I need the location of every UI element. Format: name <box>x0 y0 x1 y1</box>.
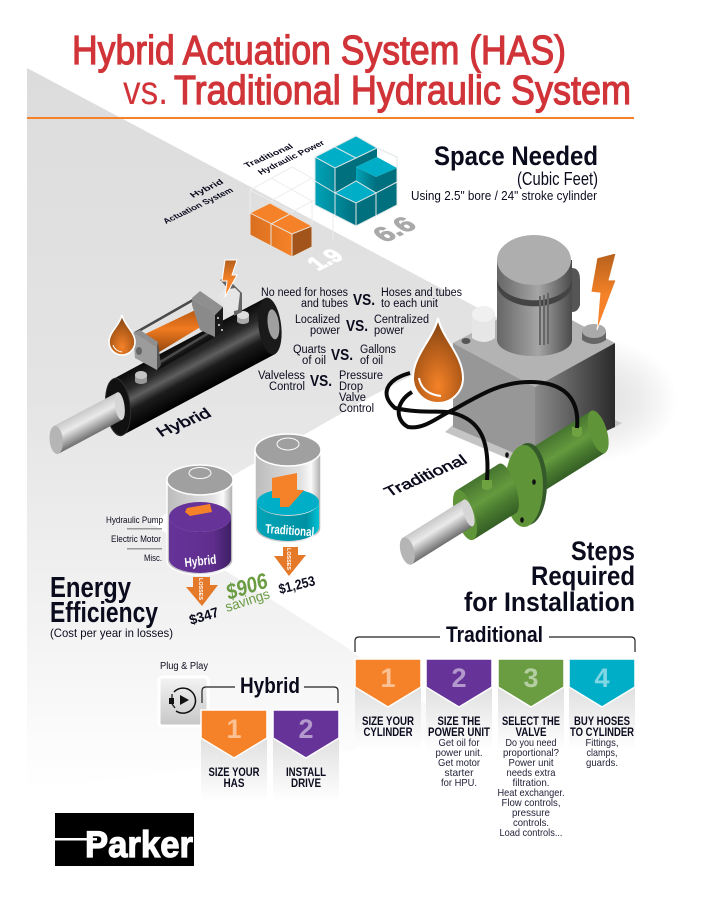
row: hoses: No need for hoses <box>261 287 348 299</box>
savings callout: savings <box>223 585 272 615</box>
steps heading: for Installation <box>464 587 635 617</box>
step card 3: proportional? <box>503 747 559 759</box>
arrow: hybrid losses <box>186 577 218 606</box>
traditional power unit illustration <box>381 235 622 568</box>
hybrid step card 2: INSTALL <box>286 767 326 779</box>
icon: lightning small <box>222 260 237 297</box>
arrow: traditional losses: LOSSES <box>285 548 291 570</box>
title: vs. <box>123 67 168 113</box>
row: power: VS. <box>346 318 368 335</box>
value 1.9: 1.9 <box>301 245 350 275</box>
step card 3: pressure <box>512 807 550 819</box>
hybrid heading with bracket: Hybrid <box>240 673 300 698</box>
hybrid step card 1: SIZE YOUR <box>208 767 260 779</box>
white filter cap <box>462 306 495 344</box>
panel: hybrid steps <box>159 661 339 801</box>
green flange <box>505 443 547 527</box>
step card 3 <box>498 659 564 839</box>
row: hoses: and tubes <box>301 298 348 310</box>
heading: (Cost per year in losses) <box>50 626 173 640</box>
legend labels <box>106 515 163 564</box>
row: control: Drop <box>339 381 363 393</box>
value $347: $347 <box>187 604 221 628</box>
panel: space needed <box>161 136 598 275</box>
row: oil <box>293 344 396 367</box>
row: control: Control <box>269 381 305 393</box>
row: control: Control <box>339 403 374 415</box>
value 6.6: 6.6 <box>366 212 423 247</box>
icon: lightning large <box>591 253 616 330</box>
hybrid step card 2: 2 <box>298 714 314 744</box>
hybrid step card 1: 1 <box>226 714 242 744</box>
steps heading <box>464 536 635 617</box>
cube chart: traditional 6.6 <box>315 136 397 226</box>
hybrid label: Hybrid <box>153 406 215 440</box>
motor button <box>582 324 606 344</box>
label: hybrid actuation system: Hybrid <box>188 178 226 199</box>
step card 4: TO CYLINDER <box>570 727 635 739</box>
step card 2: power unit. <box>436 747 482 759</box>
row: hoses: VS. <box>353 292 375 309</box>
step card 3: filtration. <box>512 777 550 789</box>
space needed heading: (Cubic Feet) <box>517 169 598 189</box>
hybrid step card 1 <box>201 710 267 801</box>
row: control: VS. <box>310 373 332 390</box>
step card 2: 2 <box>451 663 467 693</box>
mini actuator <box>133 277 242 370</box>
label: traditional hydraulic power: Traditional <box>242 142 295 169</box>
step card 3: Do you need <box>506 737 557 749</box>
step card 3: controls. <box>513 817 549 829</box>
hoses <box>387 373 577 480</box>
background grey diagonal wedge <box>27 68 678 790</box>
step card 4 <box>569 659 635 769</box>
step card 2: Get oil for <box>438 737 480 749</box>
traditional label: Traditional <box>381 453 471 500</box>
label: hybrid actuation system: Actuation System <box>161 186 235 225</box>
row: hoses: to each unit <box>381 298 439 310</box>
hybrid step card 2 <box>273 710 339 801</box>
step card 3: VALVE <box>516 727 547 739</box>
row: control <box>258 370 383 415</box>
step card 1: CYLINDER <box>364 727 413 739</box>
heading: Efficiency <box>50 597 158 629</box>
comparison list <box>258 287 462 415</box>
step card 3: 3 <box>523 663 539 693</box>
steps heading: Steps <box>571 536 635 566</box>
step card 3: SELECT THE <box>502 716 560 728</box>
title <box>72 27 631 113</box>
hybrid cylinder illustration <box>47 260 286 457</box>
hybrid battery: Hybrid <box>184 552 217 570</box>
step card 2: for HPU. <box>441 777 477 789</box>
panel: steps required <box>355 536 635 839</box>
legend labels: Misc. <box>144 553 162 564</box>
heading <box>50 572 173 640</box>
rod <box>397 497 477 568</box>
step card 2: Get motor <box>438 757 480 769</box>
row: oil: Quarts <box>293 344 326 356</box>
step card 2: POWER UNIT <box>428 727 490 739</box>
traditional battery <box>255 434 321 543</box>
green cylinder rear section <box>509 406 613 504</box>
row: power: Centralized <box>374 314 429 326</box>
base plate <box>445 420 622 470</box>
row: power: Localized <box>295 314 340 326</box>
step card 1: 1 <box>380 663 396 693</box>
tank box <box>453 300 615 462</box>
step card 4: clamps, <box>586 747 618 759</box>
arrow: hybrid losses: LOSSES <box>197 578 203 600</box>
row: control: Valveless <box>258 370 305 382</box>
step card 4: 4 <box>594 663 610 693</box>
parker logo <box>55 813 194 866</box>
heading: Energy <box>50 572 131 604</box>
ports <box>482 427 582 490</box>
title underline <box>27 117 634 119</box>
arrow: traditional losses <box>274 547 306 576</box>
rod <box>47 390 127 457</box>
row: control: Pressure <box>339 370 383 382</box>
green cylinder front section <box>448 459 524 545</box>
cube chart: hybrid 1.9 <box>250 203 312 257</box>
space needed heading <box>411 141 598 203</box>
hybrid battery <box>167 465 233 575</box>
wireframe grid <box>250 167 333 250</box>
step card 3: Flow controls, <box>502 797 560 809</box>
plug and play label: Plug & Play <box>160 661 208 672</box>
space needed heading: Using 2.5" bore / 24" stroke cylinder <box>411 189 597 203</box>
row: oil: Gallons <box>360 344 396 356</box>
icon: oil drop large <box>413 318 463 403</box>
row: power: power <box>310 325 340 337</box>
hybrid step card 2: DRIVE <box>291 778 321 790</box>
step card 4: Fittings, <box>586 737 618 749</box>
black cylinder body <box>101 293 286 441</box>
step card 4: BUY HOSES <box>574 716 630 728</box>
motor <box>497 235 580 356</box>
step card 2: starter <box>444 767 474 779</box>
hybrid step card 1: HAS <box>224 778 245 790</box>
port caps <box>135 311 249 384</box>
steps heading: Required <box>531 561 635 591</box>
row: oil: of oil <box>302 355 326 367</box>
step card 3: needs extra <box>506 767 556 779</box>
row: oil: VS. <box>331 347 353 364</box>
row: control: Valve <box>339 392 366 404</box>
step card 3: Heat exchanger. <box>498 787 564 799</box>
legend labels: Electric Motor <box>111 534 161 545</box>
title: Traditional Hydraulic System <box>174 67 631 113</box>
legend labels: Hydraulic Pump <box>106 515 163 526</box>
panel: energy efficiency <box>50 434 321 640</box>
row: hoses: Hoses and tubes <box>381 287 462 299</box>
parker logo: Parker <box>85 824 193 865</box>
row: power <box>295 314 429 337</box>
step card 3: Power unit <box>508 757 554 769</box>
row: oil: of oil <box>360 355 383 367</box>
hybrid heading with bracket <box>202 673 338 703</box>
space needed heading: Space Needed <box>434 141 598 171</box>
savings callout: $906 <box>222 568 271 605</box>
step card 4: guards. <box>586 757 618 769</box>
step card 2: SIZE THE <box>438 716 481 728</box>
icon: oil drop small <box>109 315 135 355</box>
label: traditional hydraulic power: Hydraulic Power <box>256 138 327 176</box>
traditional heading with bracket <box>355 622 635 652</box>
traditional battery: Traditional <box>265 521 315 539</box>
title: Hybrid Actuation System (HAS) <box>72 27 566 73</box>
savings callout <box>222 568 272 615</box>
row: power: power <box>374 325 404 337</box>
step card 1 <box>355 659 421 750</box>
step card 3: Load controls... <box>500 827 562 839</box>
value $1,253: $1,253 <box>277 572 317 597</box>
step card 2 <box>426 659 492 789</box>
row: hoses <box>261 287 462 310</box>
step card 1: SIZE YOUR <box>362 716 415 728</box>
traditional heading with bracket: Traditional <box>446 622 543 647</box>
icon: plug and play <box>159 677 208 726</box>
